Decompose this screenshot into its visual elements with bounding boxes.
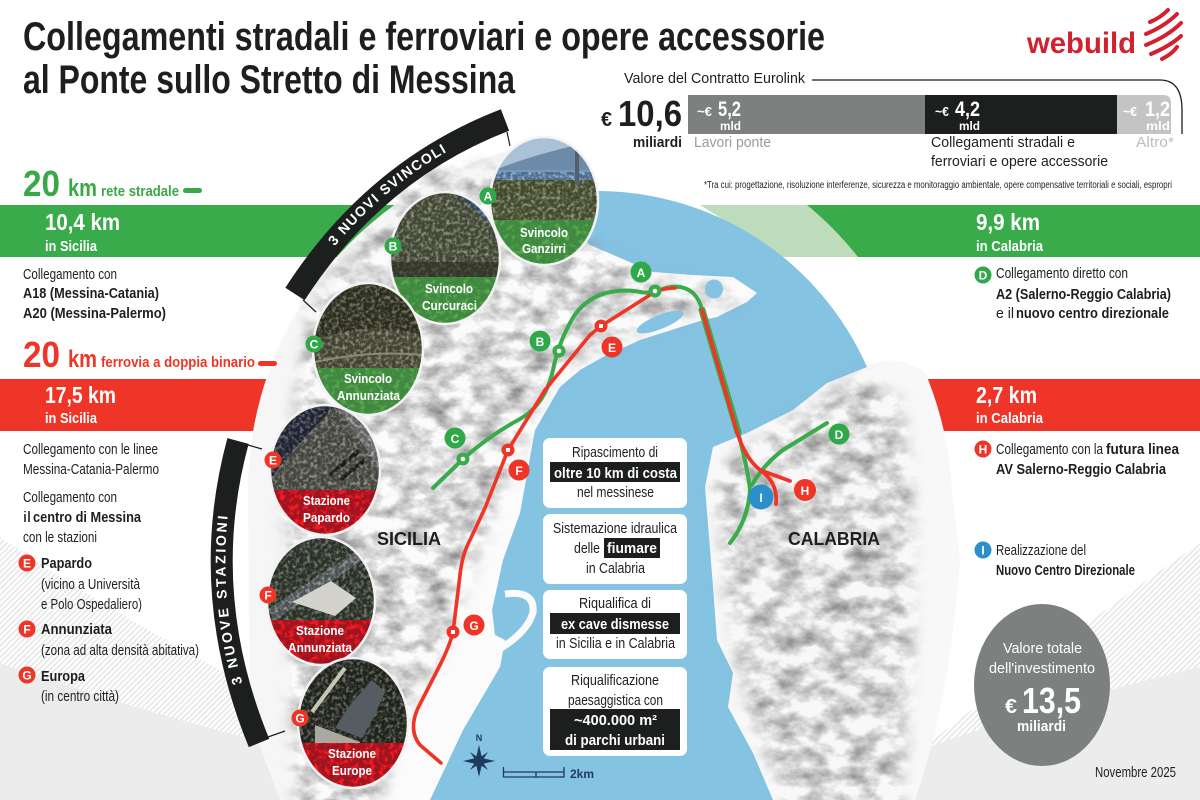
- station F: Annunziata: [41, 622, 113, 638]
- rail Calabria text: [974, 440, 1180, 478]
- station E: e Polo Ospedaliero): [41, 597, 142, 613]
- date: Novembre 2025: [1095, 765, 1176, 781]
- map badges: B: [536, 335, 545, 349]
- photo: Svincolo Annunziata: C: [310, 338, 319, 352]
- station E: (vicino a Università: [41, 577, 141, 593]
- road heading: [23, 163, 202, 204]
- label: Calabria: CALABRIA: [788, 528, 880, 549]
- bar: altro: 1,2: [1145, 98, 1170, 121]
- callout: total investment: dell'investimento: [989, 661, 1095, 677]
- road heading: 20: [23, 163, 60, 204]
- land: Calabria: [705, 361, 960, 800]
- rail Calabria value: in Calabria: [976, 410, 1044, 427]
- callout: sistemazione idraulica: Sistemazione idraulica: [553, 521, 678, 537]
- photo: Svincolo Annunziata: Svincolo: [344, 372, 392, 386]
- centro direzionale text: Nuovo Centro Direzionale: [996, 563, 1135, 579]
- road Calabria text: Collegamento diretto con: [996, 266, 1128, 282]
- land base: Sicilia: [248, 141, 757, 800]
- contract total: [601, 93, 682, 151]
- callout: total investment: Valore totale: [1003, 641, 1082, 657]
- station E: Papardo: [41, 556, 92, 572]
- photo: Stazione Papardo: Papardo: [303, 511, 350, 525]
- station E: E: [23, 556, 31, 570]
- callout: sistemazione idraulica: [543, 514, 687, 584]
- photo: Stazione Papardo: E: [269, 454, 277, 468]
- road Sicilia text: A20 (Messina-Palermo): [23, 306, 166, 322]
- photo: Svincolo Curcuraci: Svincolo: [425, 282, 473, 296]
- station F: (zona ad alta densità abitativa): [41, 643, 199, 659]
- photo: Stazione Europa: G: [295, 712, 305, 726]
- callout: sistemazione idraulica: fiumare: [607, 541, 657, 557]
- scale bar: 2km: [570, 767, 594, 781]
- bar: collegamenti: mld: [959, 119, 980, 133]
- map badges: [444, 262, 850, 636]
- logo: webuild: [1026, 10, 1181, 60]
- map badges: C: [451, 432, 460, 446]
- rail Sicilia text: Messina-Catania-Palermo: [23, 462, 159, 478]
- map badges: A: [637, 266, 646, 280]
- green band: [0, 205, 1200, 257]
- road Calabria text: e il: [996, 306, 1014, 322]
- icon: compass: N: [476, 733, 482, 743]
- road Calabria text: [974, 266, 1171, 322]
- red band: [0, 379, 1200, 431]
- map badges: H: [801, 484, 809, 498]
- callout: ripascimento: oltre 10 km di costa: [554, 466, 678, 482]
- road Calabria value: in Calabria: [976, 238, 1044, 255]
- rail Sicilia value: 17,5 km: [45, 382, 116, 408]
- road Sicilia text: Collegamento con: [23, 267, 117, 283]
- panel: ferrovia, Sicilia: [18, 334, 277, 705]
- rail Calabria text: futura linea: [1106, 442, 1180, 458]
- bar: collegamenti: ferroviari e opere accessorie: [931, 154, 1108, 170]
- callout: riqualifica: [543, 590, 687, 659]
- rail Sicilia text: [23, 442, 159, 546]
- photo: Svincolo Annunziata: [306, 283, 423, 415]
- callout: ripascimento: [543, 438, 687, 508]
- rail heading: ferrovia a doppia binario: [101, 354, 255, 371]
- photo: Stazione Annunziata: Annunziata: [288, 641, 353, 655]
- title: [23, 15, 825, 102]
- hook of Messina harbour: [498, 593, 533, 650]
- photo: Stazione Annunziata: F: [264, 588, 272, 602]
- arc: 3 nuovi svincoli: 3 NUOVI SVINCOLI: [328, 144, 446, 245]
- photo: Stazione Papardo: [264, 405, 380, 535]
- callout: riqualifica: in Sicilia e in Calabria: [556, 636, 676, 652]
- scale bar: [504, 767, 594, 781]
- bar: lavori ponte: 5,2: [718, 98, 741, 121]
- label: Sicilia: SICILIA: [377, 528, 441, 549]
- panel: contract value: [601, 71, 1182, 191]
- road Calabria value: [976, 209, 1044, 255]
- panel: Calabria rail: [974, 382, 1180, 579]
- rail Calabria text: Collegamento con la: [996, 442, 1104, 458]
- rail Sicilia text: il: [23, 510, 31, 526]
- callout: riqualificazione paesaggistica: [543, 667, 687, 756]
- road Sicilia text: A18 (Messina-Catania): [23, 286, 159, 302]
- map badges: E: [608, 341, 616, 355]
- rail Sicilia text: centro di Messina: [33, 510, 142, 526]
- callout: riqualificazione paesaggistica: di parchi urbani: [565, 733, 665, 749]
- callout: riqualificazione paesaggistica: ~400.000 m²: [574, 713, 657, 729]
- bar: collegamenti: 4,2: [955, 98, 980, 121]
- rail Calabria value: [976, 382, 1044, 427]
- road Calabria value: 9,9 km: [976, 209, 1040, 235]
- title: al Ponte sullo Stretto di Messina: [23, 58, 516, 102]
- arc: 3 nuovi svincoli: [285, 109, 511, 312]
- bar: altro: mld: [1146, 119, 1170, 133]
- callout: total investment: miliardi: [1017, 719, 1066, 735]
- callout: riqualifica: ex cave dismesse: [561, 617, 669, 633]
- station E: [18, 554, 142, 613]
- bar: lavori ponte: [688, 95, 925, 151]
- sea: [420, 191, 867, 800]
- photo: Svincolo Ganzirri: A: [484, 190, 493, 204]
- road Sicilia value: 10,4 km: [45, 209, 120, 235]
- bar: lavori ponte: ~€: [697, 104, 712, 119]
- rail Calabria text: AV Salerno-Reggio Calabria: [996, 462, 1167, 478]
- rail heading: km: [68, 346, 97, 373]
- map badges: D: [835, 428, 844, 442]
- road Calabria text: D: [979, 268, 988, 282]
- rail Sicilia value: in Sicilia: [45, 410, 98, 427]
- bar: lavori ponte: Lavori ponte: [694, 135, 771, 151]
- callout: sistemazione idraulica: delle: [574, 541, 600, 557]
- station F: F: [23, 622, 31, 636]
- map badges: G: [469, 619, 479, 633]
- photo: Svincolo Ganzirri: [480, 137, 598, 265]
- contract total: miliardi: [633, 135, 682, 151]
- rail Sicilia text: con le stazioni: [23, 530, 97, 546]
- road Sicilia value: in Sicilia: [45, 238, 98, 255]
- rail Calabria text: H: [979, 442, 987, 456]
- bar: collegamenti: ~€: [935, 104, 949, 119]
- centro direzionale text: Realizzazione del: [996, 543, 1086, 559]
- photo: Svincolo Ganzirri: Svincolo: [520, 226, 568, 240]
- road Calabria text: nuovo centro direzionale: [1016, 306, 1169, 322]
- rail Calabria value: 2,7 km: [976, 382, 1037, 408]
- photo: Svincolo Curcuraci: B: [389, 240, 398, 254]
- rail heading: 20: [23, 334, 60, 375]
- road heading: rete stradale: [101, 183, 179, 200]
- contract total: €: [601, 109, 612, 131]
- bar: altro: ~€: [1123, 104, 1137, 119]
- photo: Svincolo Curcuraci: [384, 192, 500, 324]
- callout: sistemazione idraulica: in Calabria: [586, 561, 646, 577]
- bar: collegamenti: [925, 95, 1117, 170]
- station G: [18, 666, 119, 705]
- photo: Stazione Europa: Europe: [332, 764, 372, 778]
- map badges: I: [759, 491, 763, 505]
- road Sicilia value: [45, 209, 120, 255]
- panel: Calabria road: [974, 209, 1171, 322]
- centro direzionale text: [974, 542, 1135, 579]
- contract heading: Valore del Contratto Eurolink: [624, 71, 806, 87]
- rail Sicilia text: Collegamento con le linee: [23, 442, 158, 458]
- photo: Stazione Europa: [292, 658, 408, 788]
- callout: riqualificazione paesaggistica: Riqualificazione: [571, 673, 659, 689]
- station F: [18, 620, 199, 659]
- rail Sicilia value: [45, 382, 116, 427]
- centro direzionale text: I: [981, 544, 985, 558]
- logo: webuild: webuild: [1026, 27, 1136, 60]
- road heading: km: [68, 175, 97, 202]
- map: [248, 140, 960, 800]
- land: Sicilia coast: [280, 180, 757, 800]
- road Calabria text: A2 (Salerno-Reggio Calabria): [996, 287, 1171, 303]
- callout: total investment: [974, 604, 1110, 766]
- bar: lavori ponte: mld: [720, 119, 741, 133]
- bar: altro: [1117, 95, 1174, 151]
- lagoons: [634, 280, 723, 338]
- callout: ripascimento: nel messinese: [577, 485, 654, 501]
- rail route: [413, 288, 790, 763]
- bar: altro: Altro*: [1136, 135, 1174, 151]
- station G: Europa: [41, 669, 86, 685]
- rail Sicilia text: Collegamento con: [23, 490, 117, 506]
- arc: 3 nuove stazioni: [210, 438, 286, 748]
- title: Collegamenti stradali e ferroviari e opere accessorie: [23, 15, 825, 59]
- station G: (in centro città): [41, 689, 119, 705]
- road route: [433, 287, 827, 543]
- rail heading: [23, 334, 277, 375]
- photo: Stazione Annunziata: [260, 537, 375, 665]
- callout: riqualifica: Riqualifica di: [579, 596, 651, 612]
- bar: collegamenti: Collegamenti stradali e: [931, 135, 1075, 151]
- road Sicilia text: [23, 267, 166, 322]
- icon: compass: [463, 733, 495, 777]
- route nodes: [446, 284, 662, 638]
- station G: G: [22, 668, 32, 682]
- photo: Stazione Europa: Stazione: [328, 747, 376, 761]
- photo: Stazione Papardo: Stazione: [303, 494, 350, 508]
- callout: total investment: €: [1005, 696, 1017, 718]
- callout: riqualificazione paesaggistica: paesaggistica con: [568, 693, 663, 709]
- panel: rete stradale, Sicilia: [23, 163, 202, 322]
- photo: Svincolo Annunziata: Annunziata: [337, 389, 401, 403]
- callout: ripascimento: Ripascimento di: [572, 445, 658, 461]
- contract total: 10,6: [618, 93, 682, 134]
- photo: Svincolo Ganzirri: Ganzirri: [522, 242, 566, 256]
- photo: Stazione Annunziata: Stazione: [296, 624, 344, 638]
- map badges: F: [515, 464, 523, 478]
- arc: 3 nuove stazioni: 3 NUOVE STAZIONI: [216, 516, 242, 685]
- callout: total investment: 13,5: [1022, 680, 1081, 721]
- photo: Svincolo Curcuraci: Curcuraci: [422, 299, 477, 313]
